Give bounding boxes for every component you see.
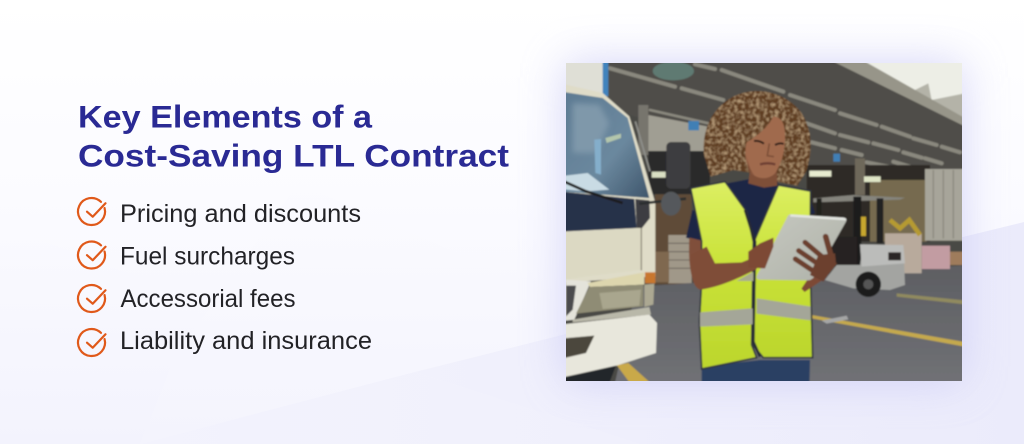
item: liability and insurance: Liability and insurance <box>120 327 372 355</box>
right wrist <box>803 268 830 290</box>
title <box>78 98 510 174</box>
hair <box>704 91 811 186</box>
item: fuel surcharges: Fuel surcharges <box>120 242 295 270</box>
checklist <box>78 198 372 356</box>
truck cab <box>560 83 690 383</box>
photo: worker in safety vest with tablet at a freight dock <box>560 55 970 390</box>
shirt <box>728 179 778 237</box>
vest <box>691 182 757 369</box>
upper arm <box>688 236 702 274</box>
title: Cost-Saving LTL Contract <box>78 138 510 174</box>
title: Key Elements of a <box>78 98 373 134</box>
tablet <box>757 214 846 280</box>
forearm across vest <box>690 247 760 290</box>
worker <box>686 91 846 390</box>
jeans <box>701 360 810 381</box>
item: accessorial fees: Accessorial fees <box>120 285 296 313</box>
photo background: dock and yard <box>560 55 970 390</box>
face <box>745 117 785 178</box>
hands <box>795 237 832 274</box>
forklift <box>813 195 970 297</box>
neck <box>747 172 778 189</box>
item: pricing and discounts: Pricing and discounts <box>120 200 361 228</box>
